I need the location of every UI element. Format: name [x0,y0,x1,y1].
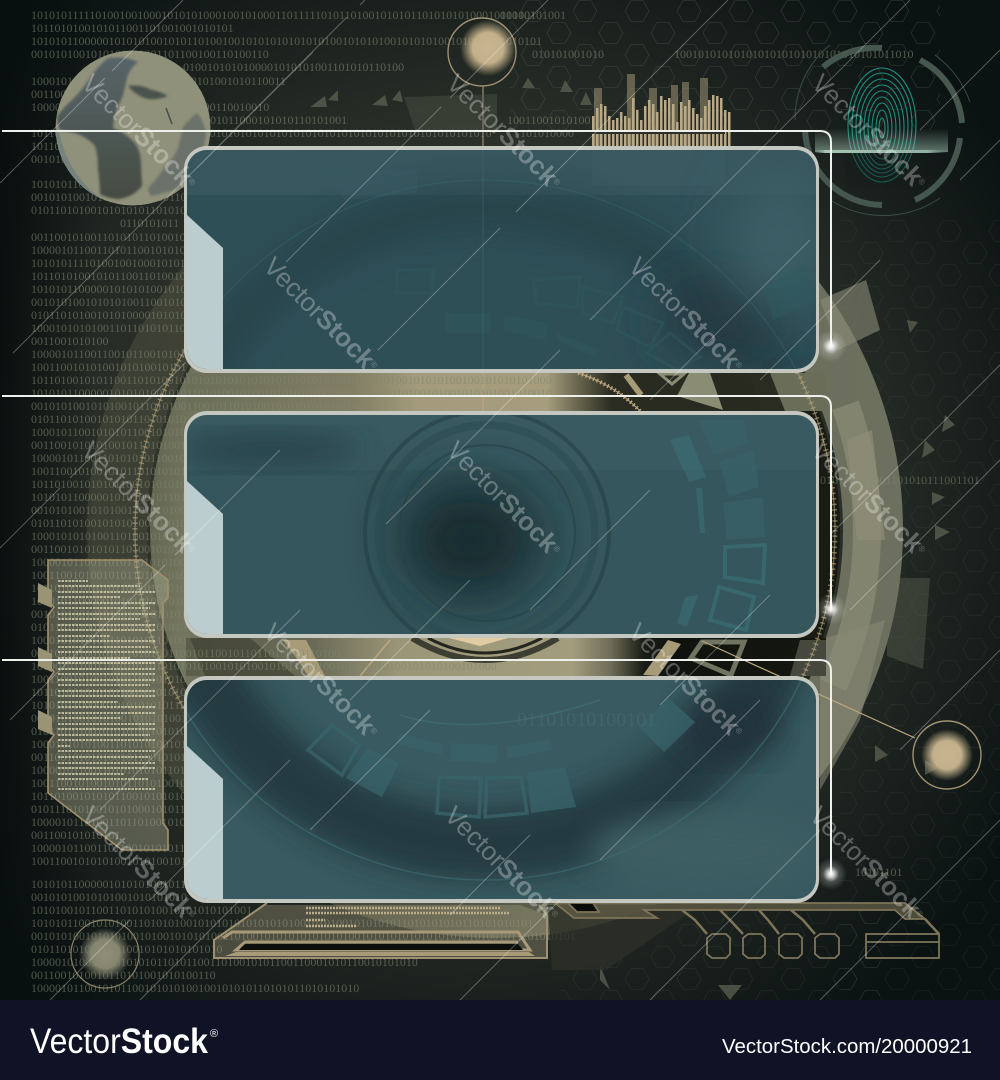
binary code streams: 10110100101010110010101010 [31,581,186,595]
binary code streams: 10011001010010101101001010 [31,568,186,582]
panel 3 [184,676,819,903]
binary code streams: 01011010100101010101101010 [31,724,186,738]
binary code streams: 10101011001010101010110101 [31,177,186,191]
watermark tiling: ® [914,909,925,919]
binary code streams: 0010101001010101001010010101010011010010101010101010100101010101010101010101001011101010101 [31,929,576,943]
binary code streams: 101101001010110011010100101010101010101010101010101010101010100101010100100101010101000 [31,373,552,387]
fingerprint [848,68,916,182]
binary code streams: 00110010101010010110010101 [31,750,186,764]
binary code streams: 1000010110011001010110010100100110010010 [31,100,269,114]
watermark tiling: VectorStock [441,68,564,191]
watermark tiling: VectorStock [441,435,564,558]
binary code streams: 1010101 [500,34,542,48]
binary code streams: 101010000 [520,126,574,140]
binary code streams: 10011001010010101100101010 [31,672,186,686]
binary code streams: 10000101100110110010101011 [31,841,185,855]
watermark tiling: ® [186,544,197,554]
binary code streams: 00101010010101001101010100 [31,503,187,517]
scan beam [815,128,948,152]
bottom left console frame [214,903,547,958]
connector line: panel 1 [2,131,847,362]
binary code streams: 10011001010010101101010010 [31,776,186,790]
Atlantic ocean [57,58,142,199]
binary code streams: 01011010100101010010101010101010 [31,942,223,956]
binary code streams: 01011101010010101000101011 [31,802,186,816]
binary code streams: 00101010010101010011001010 [31,295,187,309]
watermark tiling: ® [551,177,562,187]
binary code streams: 01011010100101010000101010 [31,308,187,322]
binary code streams: 10000101100110101010110010 [31,451,186,465]
gap between panels 1 and 2 [186,86,826,411]
binary code streams: 00101010010101001011010101 [31,607,187,621]
watermark tiling: VectorStock [806,68,929,191]
binary code streams: 10000101100110101100101010 [31,243,186,257]
watermark tiling: VectorStock [623,617,746,740]
binary code streams: 10101011000001010101001010 [31,594,187,608]
binary code streams: 0110101011 [120,216,179,230]
binary code streams: 01011000101010110101001 [210,113,347,127]
binary code streams: 10110100101010110010101010 [31,789,186,803]
connector line: panel 2 [2,396,847,625]
Mediterranean sea [128,86,168,99]
binary code streams: 0011001010010110101001010100110 [31,968,216,982]
binary code streams: 01011010100101010110101010 [31,412,186,426]
binary code streams: 00110010100110101011010010 [31,230,186,244]
binary code streams: 100001011001101010110101010101001010100101011010100101101010100101010100101000 [31,659,497,673]
binary code streams: 10101011110100100100010101 [31,256,186,270]
binary code streams: 1001010101010101010101010101010101011010 [674,47,914,61]
panel 1 [184,146,819,373]
binary code streams: 0011001010100 [31,334,109,348]
watermark tiling: ® [916,544,927,554]
binary code streams: 10000101100110101101010100 [31,555,186,569]
binary code streams: 10011001010010101101010101 [31,464,186,478]
hexagon grid [510,0,1000,1000]
watermark tiling [76,68,933,928]
bottom left beacon circle [71,920,139,988]
watermark tiling: ® [368,360,379,370]
footer bar [0,1000,1000,1080]
binary code streams: 010101001010 [532,47,604,61]
watermark tiling: VectorStock [439,800,562,923]
footer logo: VectorStock [30,1022,208,1061]
tick arc [135,180,835,880]
binary code streams: 00101010010101001010101010 [31,890,187,904]
watermark tiling: VectorStock [623,251,746,374]
binary code streams: 10101101 [855,865,903,879]
left limb shading [56,128,102,200]
binary code streams: 1000010110010101100101010100100101010110101011010101010 [31,981,359,995]
binary code streams: 01011010100101010100101010 [31,516,187,530]
binary code streams: 00101010010101010010010110 [31,190,187,204]
binary code streams: 0010101001010100101001 [31,152,163,166]
watermark tiling: ® [733,360,744,370]
scanner rings [795,45,970,216]
fingerprint scanner [795,45,970,216]
watermark tiling: VectorStock [76,800,199,923]
binary code streams: 1010100101100110101010010101010101001 [31,903,252,917]
binary code streams: 10110100101010110010101010 [31,477,186,491]
watermark tiling: VectorStock [804,800,927,923]
watermark tiling: VectorStock [76,68,199,191]
watermark tiling: ® [368,726,379,736]
binary code streams: 10101011000001010101001010 [31,282,187,296]
binary code streams: 10101011000001010101001011 [31,877,186,891]
binary code streams: 010101011001101010111001101 [820,473,980,487]
Indian ocean [148,113,206,196]
binary code streams: 101010110010101001101010100101010101010101010010101001010101011010101010110101010101 [31,916,533,930]
binary code streams: 1011010100001010101101010101 [31,139,198,153]
binary code streams: 10110101001010110011010010 [31,269,186,283]
binary code streams: 10101011000001010101010110 [31,698,186,712]
binary code streams: 001100101010101 [31,828,121,842]
panel 3: 01101010100101 [517,709,656,731]
watermark tiling: ® [549,909,560,919]
binary code streams: 10001010101001101101010110 [31,321,186,335]
watermark tiling: ® [733,726,744,736]
decorative triangles [310,78,955,1000]
binary code streams: 10000101100110101010101101 [31,763,186,777]
watermark tiling: VectorStock [258,617,381,740]
dimmed lower fingerprint [845,153,920,187]
binary code streams: 10110100101010110010101010 [31,685,186,699]
watermark tiling: ® [186,177,197,187]
binary code streams: 00101010010101001010101001 [31,711,187,725]
bottom right connector buttons [555,903,939,958]
watermark tiling: VectorStock [806,435,929,558]
registered mark: ® [210,1028,218,1040]
binary code streams: 100110010101001 [507,113,597,127]
binary code streams: 10001011001010101100101010 [31,425,186,439]
watermark tiling: VectorStock [76,435,199,558]
watermark tiling: VectorStock [258,251,381,374]
binary code streams: 10101011000001010100101101 [31,490,186,504]
binary code streams: 10000101101001101101001010 [31,815,186,829]
binary code streams: 1011010100101011001101001001010101 [31,21,234,35]
binary code streams: 10001010101001101010110100 [31,633,186,647]
watermark tiling: ® [551,544,562,554]
bottom centre wedge [548,905,700,970]
binary code streams: 0011001010010101101010011001011001011011010010110100 [31,646,340,660]
binary code streams: 101010110000010101010010101101010010100101010101001010100101010100101001010101001010010 [31,386,552,400]
binary code streams: 10000101100110010110010101 [31,347,186,361]
connector line: panel 3 [2,660,847,890]
binary code streams: 01011010100101010101101010 [31,203,186,217]
binary code streams: 01011010100101010010101010 [31,620,187,634]
binary code streams: 01010101001 [500,8,566,22]
binary code streams: 10011001010100101010010101 [31,360,187,374]
central circular HUD rings [117,152,930,908]
binary code streams: 00110010101010110100101010 [31,542,186,556]
binary code streams: 1000101010110011100101101100101001010110011 [31,74,286,88]
globe [56,50,210,206]
Red Sea [166,108,172,124]
oceans and coastlines [57,58,206,199]
binary code streams: 10001010101001101001010110 [31,529,186,543]
binary code streams: 0100101010100001010101001101010110100 [183,60,404,74]
binary code streams: 10001010101001101010100101 [31,737,187,751]
binary code streams: 00110010101010010110101001 [31,438,186,452]
binary code streams: 0010101001010101011001101100100110100110 [31,47,269,61]
binary code streams: 1010101100000101010100101011010010010101010101010100101010100101010100101010101 [31,34,504,48]
binary code streams: 1010101111101001001000101010100010010100011011111010110100101010110101010100010101001 [31,8,536,22]
top beacon circle [448,18,516,86]
binary code streams: 00110010101101 [31,87,114,101]
panel 2 [180,411,819,655]
watermark tiling: ® [916,177,927,187]
binary code streams: 10110100101010110010110101010101010101010101010101010101010101010101010101010 [31,126,492,140]
footer image id: VectorStock.com/20000921 [722,1036,972,1058]
bar chart [592,74,730,146]
binary code streams: 10000101001011010101011010110011010010101100110001010110010101010 [31,955,418,969]
binary code streams: 10011001010101001010100101 [31,854,187,868]
left edge shading [0,0,95,1000]
watermark tiling: ® [186,909,197,919]
right beacon circle [913,721,981,789]
binary code streams: 001010100101010010110101001100101101010010101010101010001 [31,399,372,413]
server data module [38,560,168,850]
gap between panels 2 and 3 [186,638,915,738]
